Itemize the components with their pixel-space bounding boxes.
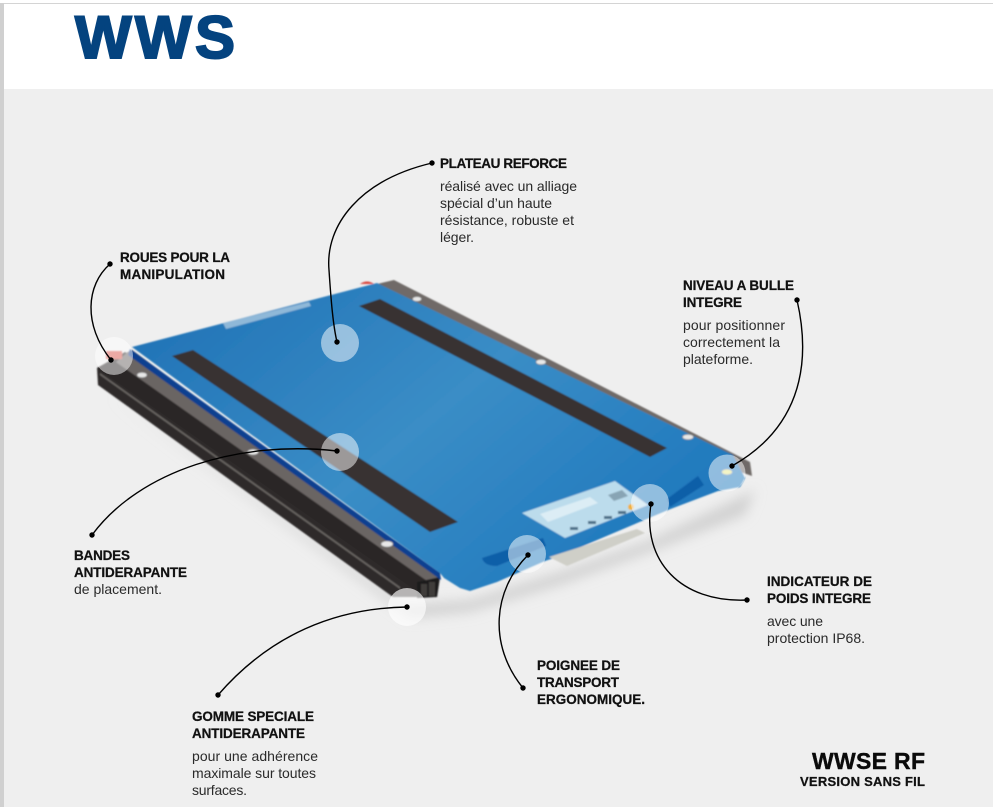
model label: WWSE RF bbox=[812, 748, 925, 774]
callout: bandes antiderapante bbox=[74, 448, 340, 597]
callout: plateau reforce: léger. bbox=[440, 229, 474, 245]
navy deck edge bbox=[128, 349, 441, 580]
product shadow bbox=[110, 395, 755, 618]
callout: bandes antiderapante: de placement. bbox=[74, 581, 162, 597]
title: WWS bbox=[75, 4, 235, 71]
red wheels bbox=[106, 351, 122, 359]
callout: niveau a bulle: NIVEAU A BULLE bbox=[683, 278, 794, 293]
bubble level bbox=[722, 470, 732, 474]
callout: gomme speciale: GOMME SPECIALE bbox=[192, 709, 314, 724]
display panel bbox=[522, 481, 648, 538]
callout: plateau reforce: spécial d’un haute bbox=[440, 195, 552, 211]
bolts bbox=[137, 297, 694, 547]
callout: plateau reforce: réalisé avec un alliage bbox=[440, 178, 577, 194]
front rail grey band bbox=[116, 352, 440, 583]
callout: bandes antiderapante: ANTIDERAPANTE bbox=[74, 565, 187, 580]
anti-slip strips bbox=[172, 350, 458, 532]
blue deck bbox=[132, 283, 745, 591]
highlight circles bbox=[95, 324, 746, 626]
callout: indicateur de poids: protection IP68. bbox=[767, 630, 865, 646]
rail light groove bbox=[100, 373, 400, 589]
callout: roues: ROUES POUR LA bbox=[120, 250, 230, 265]
callout: gomme speciale: maximale sur toutes bbox=[192, 765, 316, 781]
callout: poignee de transport: TRANSPORT bbox=[537, 675, 620, 690]
front rail top black band bbox=[97, 352, 440, 590]
callout: niveau a bulle: plateforme. bbox=[683, 351, 753, 367]
callout: gomme speciale: pour une adhérence bbox=[192, 748, 318, 764]
front rail side bbox=[97, 350, 440, 597]
handles bbox=[482, 538, 546, 566]
callout: gomme speciale: ANTIDERAPANTE bbox=[192, 726, 305, 741]
callout: poignee de transport: ERGONOMIQUE. bbox=[537, 692, 645, 707]
callout: roues: MANIPULATION bbox=[120, 267, 225, 282]
callout: indicateur de poids bbox=[648, 501, 872, 646]
rail end face bbox=[417, 577, 440, 598]
under-platform electronics bbox=[549, 529, 645, 566]
callout: niveau a bulle bbox=[683, 278, 803, 469]
model label bbox=[800, 748, 925, 789]
callout: niveau a bulle: INTEGRE bbox=[683, 295, 742, 310]
callout: bandes antiderapante: BANDES bbox=[74, 548, 130, 563]
callout: poignee de transport bbox=[499, 552, 645, 707]
product: weighing platform bbox=[97, 280, 755, 618]
model label: VERSION SANS FIL bbox=[800, 774, 925, 789]
callout: plateau reforce bbox=[329, 156, 577, 345]
callout: plateau reforce: résistance, robuste et bbox=[440, 212, 574, 228]
rear grey rail bbox=[377, 280, 752, 476]
callout: indicateur de poids: POIDS INTEGRE bbox=[767, 591, 871, 606]
callout: plateau reforce: PLATEAU REFORCE bbox=[440, 156, 567, 171]
callout: indicateur de poids: avec une bbox=[767, 613, 823, 629]
callout: gomme speciale: surfaces. bbox=[192, 782, 247, 798]
callout: roues bbox=[91, 250, 230, 363]
callout: niveau a bulle: correctement la bbox=[683, 334, 780, 350]
label strip on deck bbox=[223, 302, 311, 329]
callout: gomme speciale bbox=[192, 604, 410, 798]
callout: indicateur de poids: INDICATEUR DE bbox=[767, 574, 872, 589]
callout: niveau a bulle: pour positionner bbox=[683, 317, 785, 333]
callout: poignee de transport: POIGNEE DE bbox=[537, 658, 620, 673]
